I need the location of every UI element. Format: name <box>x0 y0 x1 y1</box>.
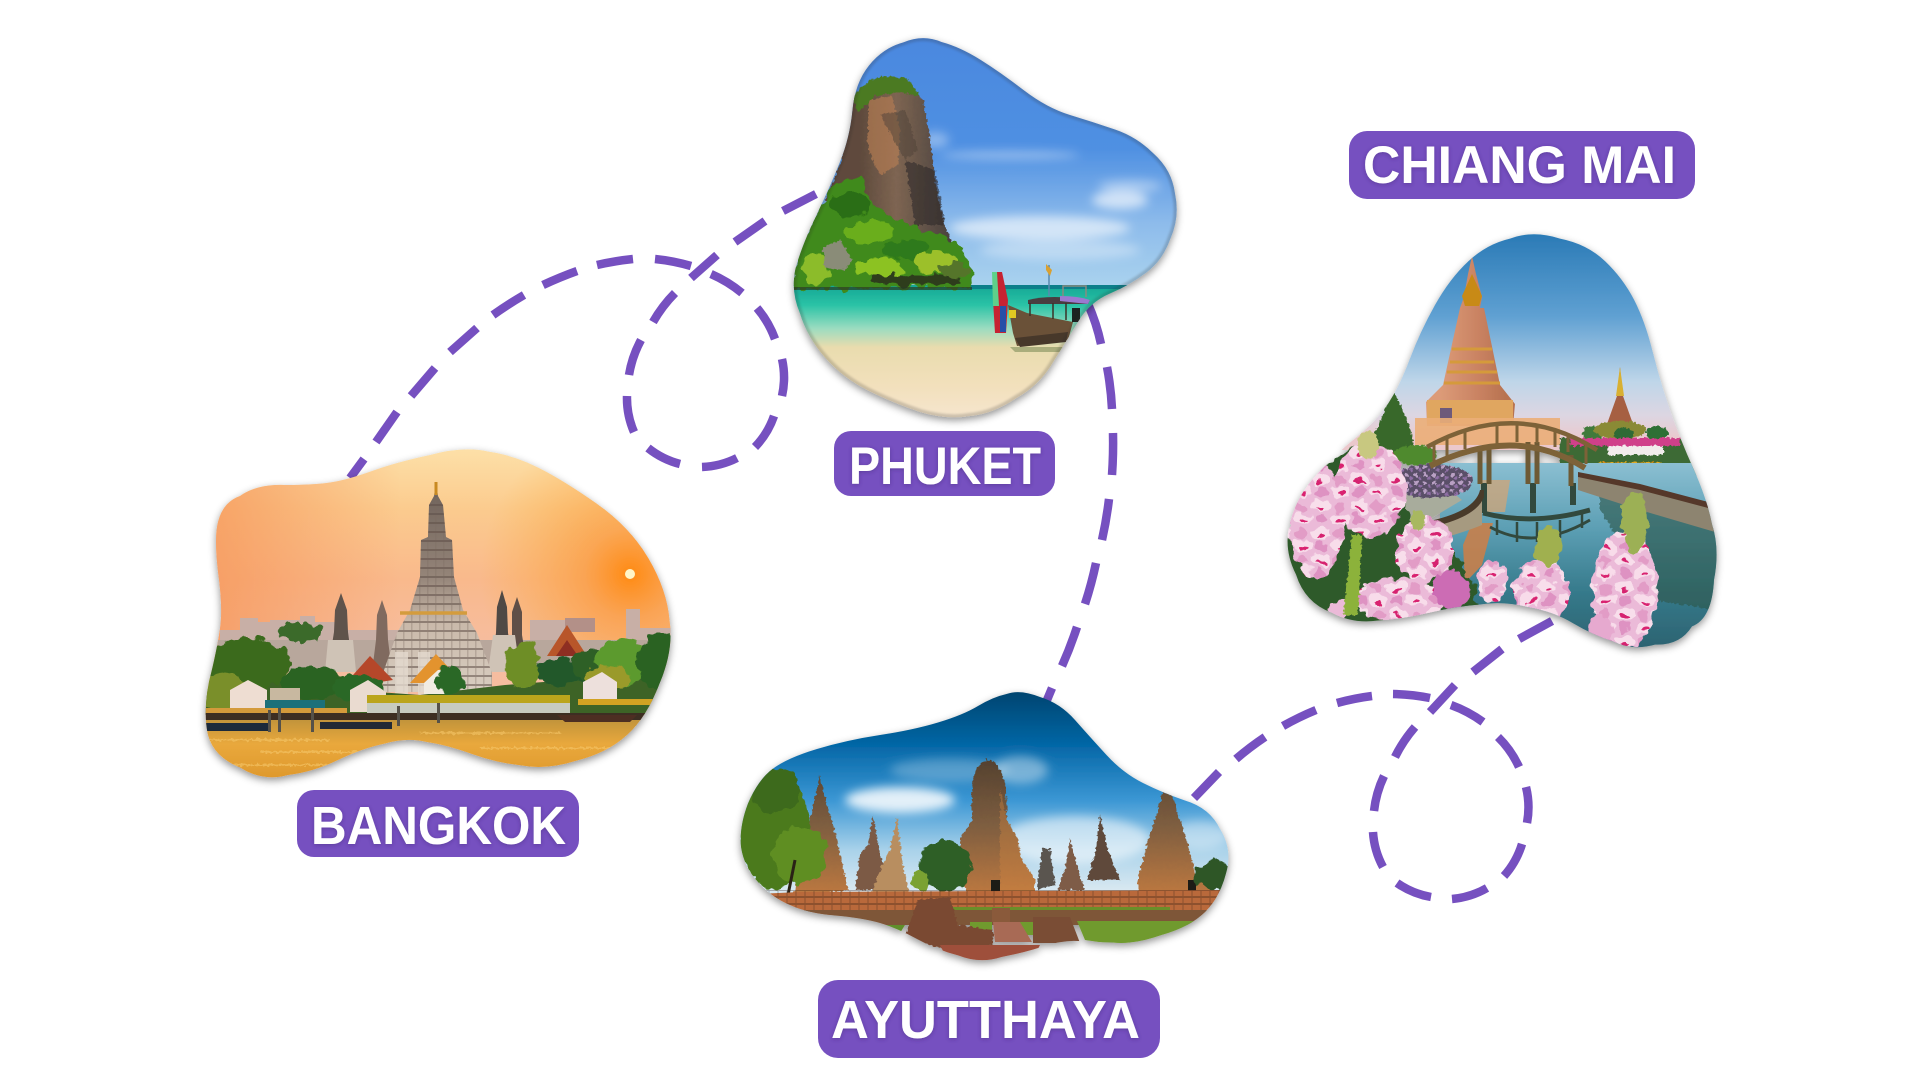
lawns <box>1077 921 1200 945</box>
cliff <box>824 91 952 243</box>
infographic canvas <box>200 36 1722 1058</box>
label: Bangkok: BANGKOK <box>311 796 566 856</box>
trees <box>196 623 682 710</box>
ruins <box>903 897 993 950</box>
clouds <box>845 756 1230 864</box>
clouds <box>921 132 1162 260</box>
small pagoda <box>1607 367 1633 424</box>
panel: Bangkok <box>190 440 690 857</box>
temple halls <box>395 652 430 695</box>
roofs <box>353 656 393 682</box>
central prang <box>383 482 492 692</box>
center tree <box>740 768 1235 892</box>
sea and sand <box>790 285 1128 425</box>
side prangs <box>332 593 349 640</box>
garden right <box>1556 420 1696 476</box>
left canal wall <box>1444 501 1482 536</box>
jungle <box>790 175 976 289</box>
label: Phuket: PHUKET <box>849 437 1041 496</box>
brick ground <box>735 890 1230 915</box>
right prang <box>1138 792 1218 905</box>
skyline <box>220 609 670 640</box>
left tree <box>740 770 810 890</box>
docks and boat <box>205 723 270 731</box>
left shrubs <box>1374 393 1414 453</box>
pavilions <box>230 680 267 708</box>
label: Chiang Mai: CHIANG MAI <box>1363 136 1676 195</box>
flower spike middle <box>1513 526 1569 626</box>
route: Phuket to Ayutthaya <box>1047 304 1113 700</box>
photo: Wat Arun at sunset <box>190 440 690 790</box>
photo: Wat Chaiwatthanaram ruins <box>730 685 1240 965</box>
panel: Phuket <box>780 30 1190 496</box>
boat <box>1008 305 1073 346</box>
gold wall <box>367 703 570 713</box>
side prangs <box>793 759 1218 907</box>
building band <box>215 640 675 672</box>
main pagoda <box>1426 256 1515 426</box>
flower spikes left <box>1282 445 1508 630</box>
bridge reflection <box>1483 483 1590 542</box>
water <box>1440 463 1725 660</box>
water <box>206 720 640 778</box>
route: Ayutthaya to Chiang Mai with loop <box>1194 621 1552 899</box>
panel: Chiang Mai <box>1280 131 1730 660</box>
photo: limestone cliff and long-tail boat <box>780 30 1190 425</box>
sun <box>625 569 635 579</box>
tree base band <box>205 672 672 715</box>
central prang <box>960 759 1035 905</box>
photo: twin pagodas and flower garden <box>1280 225 1730 660</box>
bridge <box>1427 423 1597 486</box>
right canal wall <box>1578 477 1715 532</box>
inner edge shade <box>794 38 1177 417</box>
flower spike right <box>1587 492 1658 648</box>
label: Ayutthaya: AYUTTHAYA <box>831 990 1140 1050</box>
panel: Ayutthaya <box>730 685 1240 1058</box>
stone path <box>1405 494 1462 522</box>
route: Bangkok to Phuket with loop <box>350 194 816 478</box>
